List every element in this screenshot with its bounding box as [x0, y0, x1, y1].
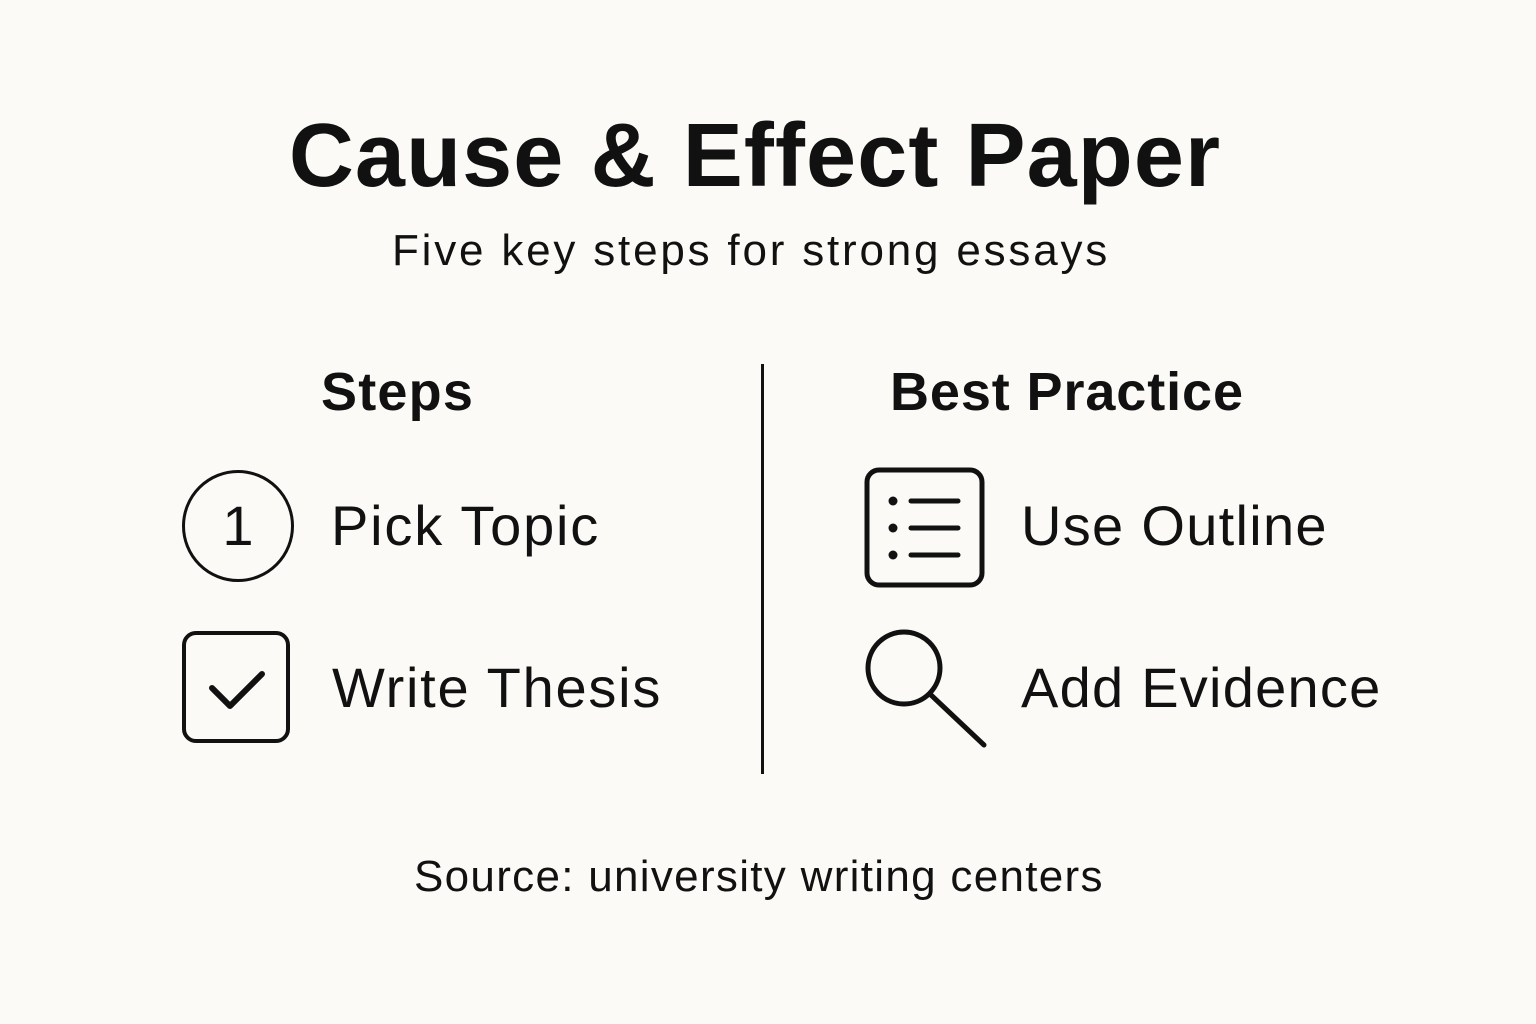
icon: magnifier [866, 630, 986, 748]
title: Cause & Effect Paper [289, 106, 1221, 206]
divider [761, 364, 764, 774]
heading: steps: Steps [321, 362, 474, 422]
icon: checkbox [182, 631, 290, 743]
text: use outline: Use Outline [1021, 494, 1328, 557]
subtitle: Five key steps for strong essays [392, 226, 1110, 275]
text: add evidence: Add Evidence [1021, 656, 1382, 719]
source: Source: university writing centers [414, 852, 1104, 901]
heading: best practice: Best Practice [890, 362, 1244, 422]
icon: number 1 circle [182, 470, 294, 582]
text: write thesis: Write Thesis [332, 656, 662, 719]
icon: outline list [864, 468, 984, 588]
icon: number 1 circle: 1 [222, 494, 254, 557]
text: pick topic: Pick Topic [331, 494, 600, 557]
